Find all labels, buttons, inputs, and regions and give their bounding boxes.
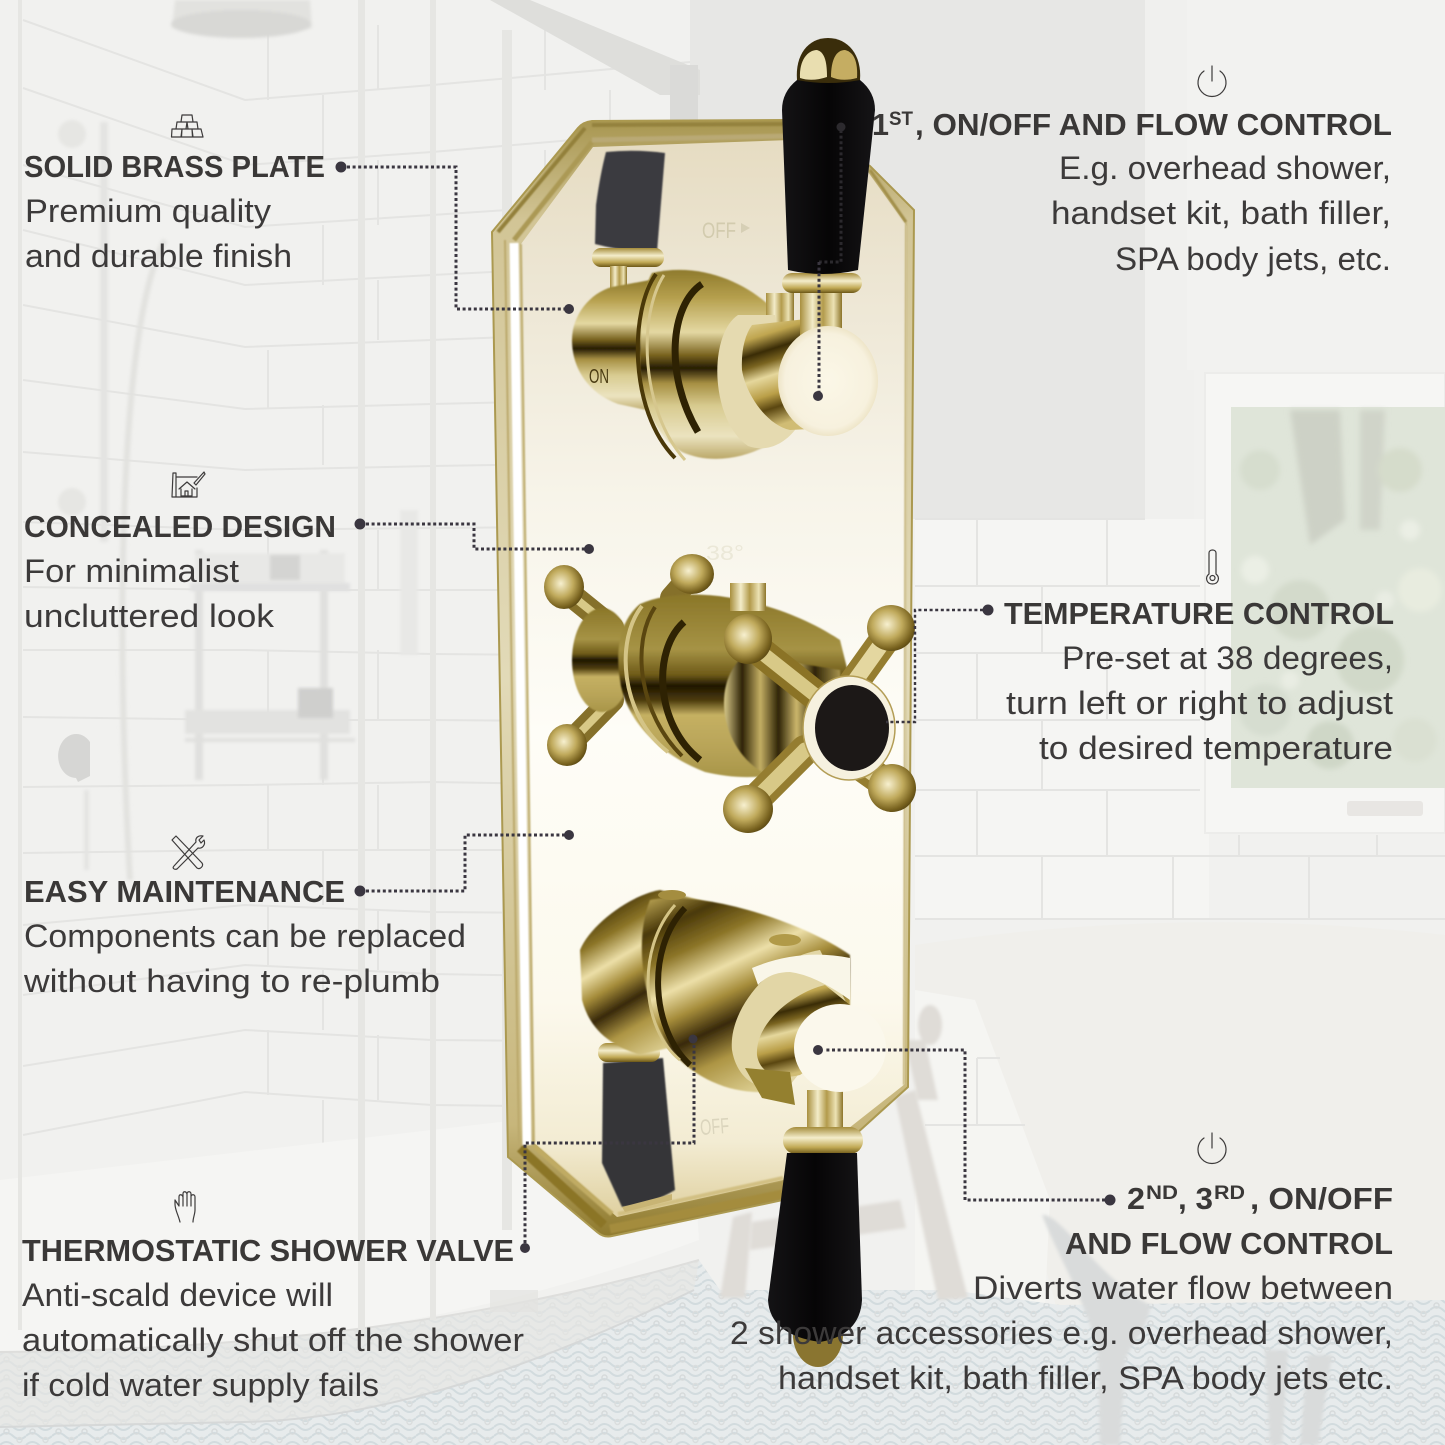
- floor mosaic: [0, 1260, 1445, 1445]
- heading line one: , ON/OFF: [1250, 1181, 1393, 1216]
- icon: house blueprint: [172, 472, 205, 497]
- window handle: [1347, 801, 1423, 816]
- heading: CONCEALED DESIGN: [24, 509, 336, 544]
- right tile area: [915, 519, 1209, 919]
- body line: For minimalist: [24, 553, 239, 589]
- front sleeve ring: [717, 315, 795, 448]
- body line: SPA body jets, etc.: [1115, 241, 1391, 277]
- ON marking: ON: [589, 366, 609, 388]
- body line: to desired temperature: [1039, 730, 1393, 766]
- lever collar: [598, 1043, 660, 1062]
- middle temperature valve: [544, 554, 916, 833]
- heading: EASY MAINTENANCE: [24, 874, 345, 909]
- icon: power: [1198, 1133, 1226, 1163]
- callout: solid brass plate: [24, 115, 325, 274]
- heading line one: RD: [1214, 1183, 1245, 1204]
- main cylinder: [618, 595, 860, 777]
- engraved markings: OFF: [702, 218, 736, 243]
- engraved markings: 38°: [706, 542, 744, 565]
- front section: [757, 985, 850, 1077]
- lower right tiles: [915, 990, 1050, 1305]
- body line: Diverts water flow between: [973, 1270, 1393, 1306]
- top on/off valve: [572, 38, 878, 460]
- icon: thermometer: [1207, 550, 1218, 584]
- front knobs: [723, 605, 916, 833]
- icon: hand: [175, 1192, 195, 1222]
- valve ring: [638, 274, 675, 458]
- back cross arms: [565, 575, 692, 745]
- lever stem right: [800, 290, 842, 336]
- upper right wall: [1187, 0, 1445, 370]
- cage: [724, 655, 845, 772]
- callout: second and third on/off and flow control: [730, 1133, 1393, 1396]
- body line: without having to re-plumb: [23, 963, 440, 999]
- ring grooves: [658, 908, 690, 1065]
- window glass with foliage: [1231, 407, 1445, 788]
- lever stem: [610, 266, 627, 294]
- window frame: [1205, 373, 1445, 833]
- heading line one: ND: [1146, 1183, 1178, 1204]
- back hub: [572, 608, 632, 712]
- engraved markings: OFF: [699, 1113, 730, 1140]
- claw foot of bath: [1042, 1215, 1332, 1445]
- leader: second and third on/off: [813, 1045, 1116, 1206]
- black lever: [768, 1153, 862, 1342]
- back knobs: [544, 554, 714, 766]
- right tile joints: [915, 519, 1445, 919]
- body line: 2 shower accessories e.g. overhead shower,: [730, 1315, 1393, 1351]
- heading: TEMPERATURE CONTROL: [1004, 596, 1394, 631]
- body line: Pre-set at 38 degrees,: [1062, 640, 1393, 676]
- icon: crossed tools: [172, 836, 205, 869]
- valve front section: [742, 318, 830, 430]
- upper left lever: [595, 151, 665, 252]
- plate bevel shading: [498, 124, 906, 1229]
- front cross arms: [752, 632, 890, 803]
- brass valve plate: [492, 120, 914, 1236]
- gold cap: [797, 38, 860, 83]
- collar: [782, 273, 862, 293]
- lighter wall strip: [1145, 0, 1194, 519]
- heading line one: 2: [1127, 1181, 1145, 1216]
- front disc: [794, 1004, 886, 1092]
- leader: easy maintenance: [354, 830, 574, 896]
- lower left lever: [602, 1058, 675, 1207]
- gold cap: [793, 1335, 843, 1367]
- heading: SOLID BRASS PLATE: [24, 149, 325, 184]
- bath tub: [915, 922, 1445, 1320]
- top pin: [730, 583, 766, 611]
- shower shelf: [185, 510, 418, 780]
- wall outlet: [58, 734, 90, 782]
- white upper highlight: [752, 955, 850, 1000]
- heading: , ON/OFF AND FLOW CONTROL: [915, 107, 1392, 142]
- heading line one: [1127, 1181, 1393, 1216]
- heading: THERMOSTATIC SHOWER VALVE: [22, 1233, 514, 1268]
- body line: handset kit, bath filler, SPA body jets etc.: [778, 1360, 1393, 1396]
- body line: automatically shut off the shower: [22, 1322, 524, 1358]
- callout: first on/off and flow control: [872, 66, 1392, 277]
- white ring: [803, 676, 895, 780]
- heading: 1: [872, 107, 889, 142]
- bottom on/off valve: [580, 890, 886, 1367]
- left tiled wall: [23, 20, 690, 1225]
- body line: Anti-scald device will: [22, 1277, 333, 1313]
- valve middle section: [640, 270, 795, 459]
- front disc: [778, 326, 878, 436]
- centre grey wall: [690, 0, 1145, 519]
- body back section: [580, 890, 720, 1055]
- callout: concealed design: [24, 472, 336, 634]
- tray front band: [0, 1260, 699, 1427]
- leader: temperature control: [886, 604, 994, 722]
- body line: Components can be replaced: [24, 918, 466, 954]
- black button: [815, 685, 889, 771]
- heading: ST: [889, 109, 913, 130]
- leader: concealed design: [354, 518, 594, 554]
- body line: and durable finish: [25, 238, 292, 274]
- leader: first on/off control: [813, 122, 846, 401]
- body line: E.g. overhead shower,: [1059, 150, 1391, 186]
- icon: brass bars: [172, 115, 203, 137]
- body main section: [642, 898, 850, 1092]
- stool: [720, 1005, 968, 1300]
- valve back section: [572, 280, 655, 412]
- glass door frame: [18, 0, 700, 1340]
- floor drain fittings: [490, 1290, 538, 1312]
- screws: [658, 890, 686, 900]
- callout: thermostatic shower valve: [22, 1192, 524, 1403]
- collar: [783, 1127, 863, 1154]
- body line: Premium quality: [25, 193, 271, 229]
- hand shower rail and hose: [58, 120, 165, 880]
- lever collar: [592, 248, 664, 267]
- callout: easy maintenance: [23, 836, 466, 999]
- bright sleeve: [732, 950, 850, 1088]
- engraved markings: [699, 218, 750, 1140]
- body line: turn left or right to adjust: [1006, 685, 1393, 721]
- callout: temperature control: [1004, 550, 1394, 766]
- body line: handset kit, bath filler,: [1051, 195, 1391, 231]
- heading line two: AND FLOW CONTROL: [1065, 1226, 1393, 1261]
- body line: if cold water supply fails: [22, 1367, 379, 1403]
- black lever: [782, 80, 875, 274]
- plate inner face: [521, 140, 907, 1217]
- body line: uncluttered look: [24, 598, 275, 634]
- rear foot: [745, 1068, 795, 1105]
- lever base foot: [622, 1194, 672, 1212]
- leader: thermostatic shower valve: [520, 1034, 698, 1253]
- lever stem: [807, 1090, 843, 1132]
- rear stem: [766, 293, 794, 323]
- icon: power: [1198, 66, 1226, 96]
- plate outer edge: [492, 120, 914, 1236]
- overhead shower head: [171, 0, 312, 38]
- heading line one: , 3: [1178, 1181, 1213, 1216]
- leader: solid brass plate: [336, 162, 574, 314]
- ring grooves: [626, 606, 668, 752]
- shower tray: [0, 1100, 699, 1352]
